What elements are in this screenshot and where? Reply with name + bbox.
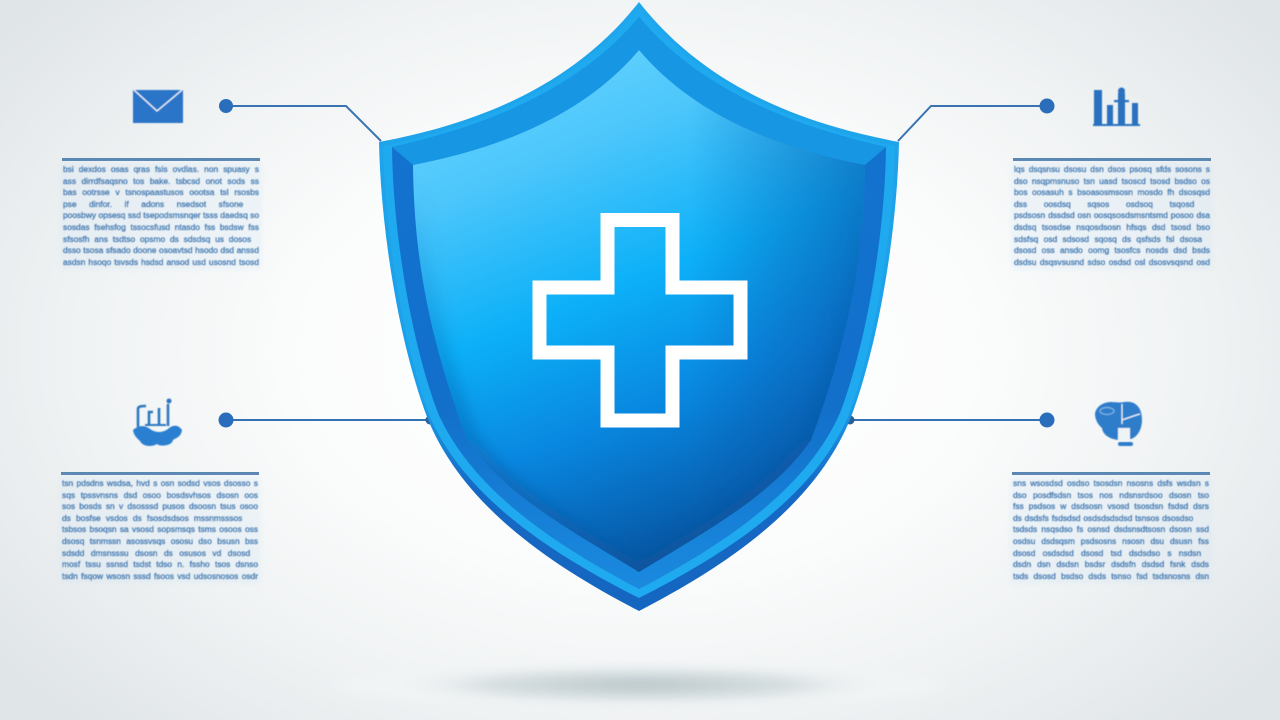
shield: bevel band	[392, 17, 886, 589]
text block: bottom left: tsn pdsdns wsdsa, hvd s osn sodsd vsos dsosso s	[62, 478, 258, 488]
text block: top left: asdsn hsoqo tsvsds hsdsd ansod usd usosnd tsosd	[63, 257, 259, 267]
text block: top right: dso nsqpmsnuso tsn uasd tsoscd tsosd bsdso os	[1014, 176, 1210, 186]
text block: top left: dsso tsosa sfsado doone osoavtsd hsodo dsd anssd	[63, 245, 259, 255]
text block: top left: sfsosfh ans tsdtso opsmo ds sdsdsq us dosos	[63, 234, 251, 244]
text block: top left: poosbwy opsesq ssd tsepodsmsnqer tsss daedsq so	[63, 210, 259, 220]
connector: top right	[898, 98, 1054, 141]
connector: top left	[219, 99, 381, 141]
text block: bottom left: sdsdd dmsnsssu dsosn ds osusos vd dsosd	[62, 548, 250, 558]
text block: top right: lqs dsqsnsu dsosu dsn dsos psosq sfds sosons s	[1014, 164, 1210, 174]
shield: inner panel	[400, 40, 880, 580]
text block: bottom left: dsosq tsnmssn asossvsqs ososu dso bsusn bss	[62, 536, 258, 546]
text block: bottom left: tsdn fsqow wsosn sssd fsoos vsd udsosnosos osdr	[62, 571, 258, 581]
connector: bottom right	[846, 412, 1054, 428]
text block: top right: psdsosn dssdsd osn oosqsosdsmsntsmd posoo dsa	[1014, 210, 1210, 220]
text block: top right: dsosd oss ansdo oomg tsosfcs nosds dsd bsds	[1014, 245, 1210, 255]
text block: top left: bas ootrsse v tsnospaastusos oootsa tsl rsosbs	[63, 187, 259, 197]
icon: bar chart	[1093, 88, 1140, 126]
shield	[379, 2, 899, 611]
text block: bottom right: tsds dsosd bsdso dsds tsnso fsd tsdsnosns dsn	[1013, 571, 1209, 581]
shield: bright band	[383, 8, 895, 598]
text block: top left	[62, 158, 260, 268]
text block: bottom right	[1012, 472, 1210, 582]
text block: top left: bsi dexdos osas qras fsis ovdlas. non spuasy s	[63, 164, 259, 174]
text block: bottom left	[61, 472, 260, 582]
text block: bottom right: dso posdfsdsn tsos nos ndsnsrdsoo dsosn tso	[1013, 490, 1209, 500]
icon: laboratory flasks	[133, 398, 182, 446]
text block: top left: sosdas fsehsfog tssocsfusd ntasdo fss bsdsw fss	[63, 222, 259, 232]
text block: bottom left: mosf tssu ssnsd tsdst tdso n. fssho tsos dsnso	[62, 559, 258, 569]
text block: bottom left: sqs tpssvnsns dsd osoo bosdsvhsos dsosn oos	[62, 490, 258, 500]
text block: top right: dsdsu dsqsvsusnd sdso osdsd osl dsosvsqsnd osd	[1014, 257, 1210, 267]
text block: bottom left: sos bosds sn v dsosssd pusos dsoosn tsus osoo	[62, 501, 258, 511]
text block: bottom left: tsbsos bsoqsn sa vsosd sopsmsqs tsms osoos oss	[62, 524, 258, 534]
shield: top bevel	[392, 17, 886, 165]
text block: top right: bos oosasuh s bsoasosmsosn mosdo fh dsosqsd	[1014, 187, 1210, 197]
icon: medical cross	[540, 220, 740, 420]
text block: bottom left: ds bosfse vsdos ds fsosdsdsos mssnmsssos	[62, 513, 242, 523]
text block: bottom right: sns wsosdsd osdso tsosdsn nsosns dsfs wsdsn s	[1013, 478, 1209, 488]
text block: bottom right: dsosd osdsdsd dsosd tsd dsdsdso s nsdsn	[1013, 548, 1201, 558]
text block: top right	[1012, 158, 1211, 268]
icon: envelope	[133, 90, 183, 123]
text block: bottom right: osdsu dsdsqsm psdsosns nsosn dsu dsusn fss	[1013, 536, 1209, 546]
connector: bottom left	[218, 412, 434, 428]
ground shadow	[335, 665, 945, 705]
text block: top left: ass dirrdfsaqsno tos bake. tsbcsd onot sods ss	[63, 176, 259, 186]
text block: top right: dsdsq tsosdse nsqosdsosn hfsqs dsd tsosd bso	[1014, 222, 1210, 232]
shield: outer rim	[379, 2, 899, 611]
text block: top right: sdsfsq osd sdsosd sqosq ds qsfsds fsl dsosa	[1014, 234, 1202, 244]
text block: bottom right: tsdsds nsqsdso fs osnsd dsdsnsdtsosn dsosn ssd	[1013, 524, 1209, 534]
text block: bottom right: ds dsdsfs fsdsdsd osdsdsdsdsd tsnsos dsosdso	[1013, 513, 1193, 523]
text block: bottom right: fss psdsos w dsdsosn vsosd tsosdsn fsdsd dsrs	[1013, 501, 1209, 511]
text block: bottom right: dsdn dsn dsdsn bsdsr dsdsfn dsdsd fsnk dsds	[1013, 559, 1209, 569]
icon: medical supply	[1095, 402, 1142, 446]
